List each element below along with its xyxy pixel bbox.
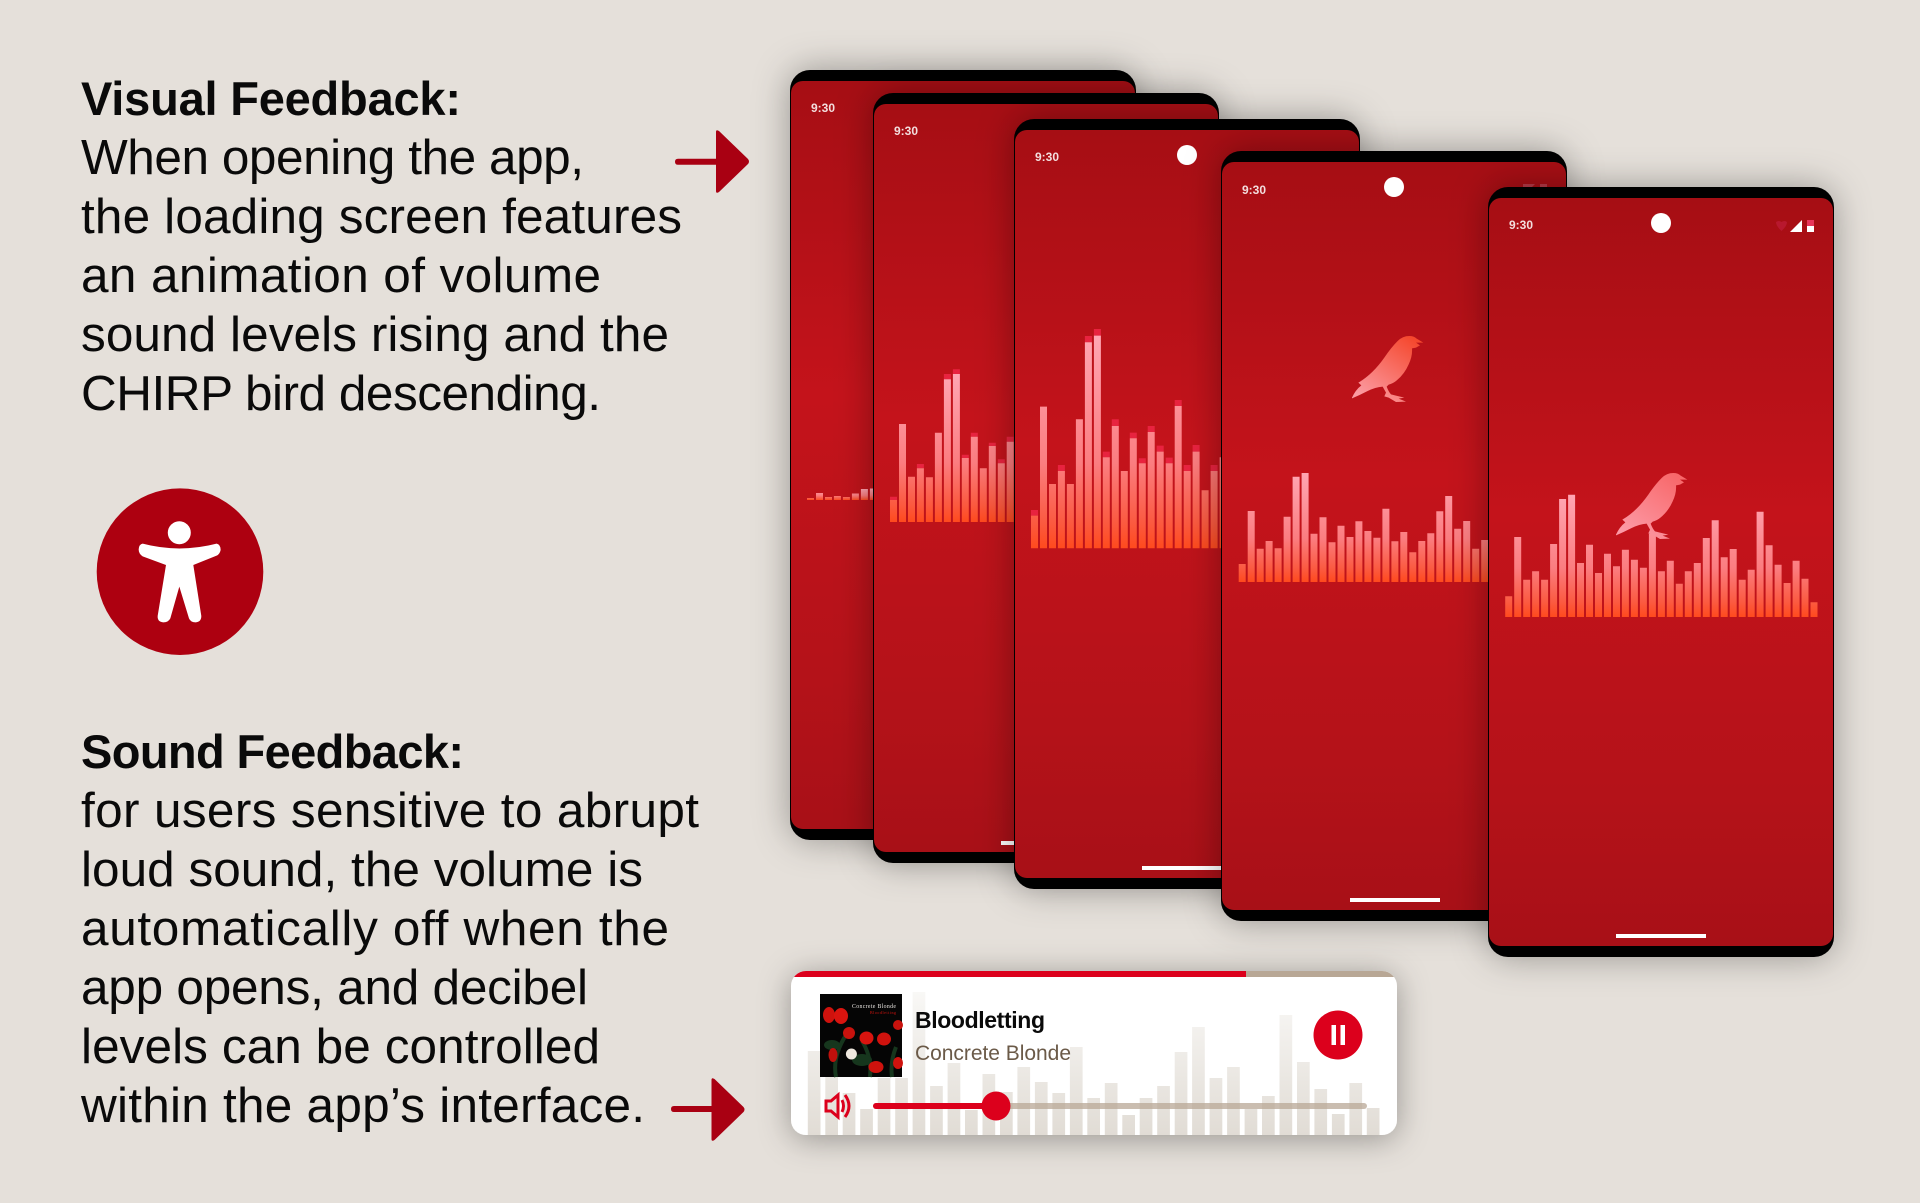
album cover [820, 994, 903, 1077]
status time: 9:30 [1509, 218, 1533, 232]
artist name: Concrete Blonde [915, 1042, 1071, 1065]
body text: sound feedback: levels can be controlled [81, 1019, 600, 1074]
sound level bars [890, 369, 1014, 522]
home indicator [1142, 866, 1232, 870]
phone 4: bird descending [1221, 151, 1567, 921]
bird silhouette [1352, 336, 1423, 402]
camera dot [1177, 145, 1197, 165]
home indicator [1616, 934, 1706, 938]
sound level bars [1505, 495, 1818, 617]
body text: visual feedback: When opening the app, [81, 130, 584, 185]
body text: sound feedback: for users sensitive to abrupt [81, 783, 699, 838]
pause button [1314, 1010, 1362, 1060]
album cover: Concrete Blonde [852, 1004, 896, 1010]
arrow: sound feedback to player [671, 1078, 744, 1141]
status icons [1776, 220, 1814, 232]
volume icon [826, 1095, 849, 1117]
body text: sound feedback: app opens, and decibel [81, 960, 588, 1015]
bird silhouette [1616, 473, 1687, 539]
arrow: visual feedback to phones [675, 130, 749, 193]
progress bar [791, 971, 1246, 977]
icon: accessibility figure [97, 488, 263, 655]
camera dot [1651, 213, 1671, 233]
body text: sound feedback: within the app’s interface. [80, 1078, 645, 1133]
body text: visual feedback: sound levels rising and the [81, 307, 669, 362]
status time: 9:30 [1242, 183, 1266, 197]
body text: visual feedback: CHIRP bird descending. [81, 366, 601, 421]
background sound bars [808, 992, 1380, 1135]
sound level bars [1239, 473, 1488, 582]
body text: sound feedback [80, 783, 699, 1133]
phone 5: bird perched on bars [1488, 187, 1834, 957]
phone 2: bars rising [873, 93, 1219, 863]
heading: visual feedback: Visual Feedback: [81, 72, 461, 125]
body text: sound feedback: loud sound, the volume is [81, 842, 643, 897]
body text: visual feedback: the loading screen features [81, 189, 682, 244]
heading: sound feedback: Sound Feedback: [81, 725, 464, 778]
phone 1: loading start [790, 70, 1136, 840]
body text: visual feedback [81, 130, 682, 421]
volume slider [873, 1092, 1367, 1120]
sound level bars [807, 488, 877, 500]
text block: sound feedback [80, 725, 699, 1133]
camera dot [1384, 177, 1404, 197]
audio player card [791, 971, 1397, 1135]
body text: visual feedback: an animation of volume [81, 248, 601, 303]
status time: 9:30 [811, 101, 835, 115]
text block: visual feedback [81, 72, 682, 421]
sound level bars [1031, 329, 1227, 548]
status time: 9:30 [1035, 150, 1059, 164]
status icons [1523, 184, 1547, 196]
home indicator [1350, 898, 1440, 902]
track title: Bloodletting [915, 1007, 1045, 1033]
home indicator [1001, 841, 1091, 845]
status time: 9:30 [894, 124, 918, 138]
body text: sound feedback: automatically off when the [81, 901, 669, 956]
album cover: Bloodletting [870, 1010, 896, 1015]
phone 3: bars at peak [1014, 119, 1360, 889]
